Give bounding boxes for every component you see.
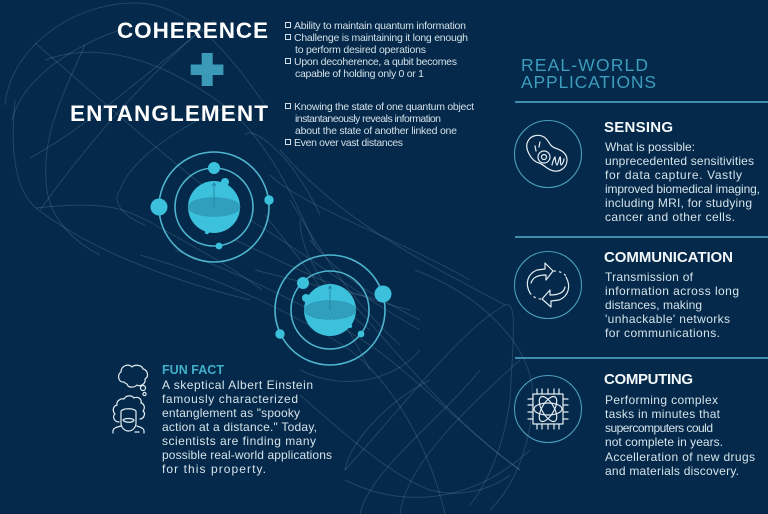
- heading: sensing: SENSING: [604, 119, 673, 136]
- text block: computing: [605, 393, 755, 478]
- text block: coherence bullets: capable of holding only 0 or 1: [295, 68, 424, 80]
- text block: computing: tasks in minutes that: [605, 407, 721, 421]
- text block: coherence bullets: to perform desired operations: [295, 44, 426, 56]
- text block: sensing: including MRI, for studying: [605, 196, 752, 210]
- text block: communication: [605, 270, 739, 340]
- icon: quantum chip: [514, 376, 582, 442]
- background wireframe capsule: [5, 3, 532, 514]
- text block: fun fact: for this property.: [162, 462, 266, 476]
- text block: computing: supercomputers could: [605, 421, 713, 435]
- heading: fun fact: FUN FACT: [162, 363, 224, 377]
- atom: second qubit: [275, 255, 392, 365]
- text block: communication: 'unhackable' networks: [605, 312, 730, 326]
- text block: entanglement bullets: Knowing the state of one quantum object: [294, 101, 474, 113]
- text block: entanglement bullets: [286, 101, 474, 149]
- text block: fun fact: A skeptical Albert Einstein: [162, 378, 313, 392]
- text block: computing: not complete in years.: [605, 435, 723, 449]
- text block: sensing: [605, 140, 760, 224]
- icon: plus sign: [191, 53, 223, 86]
- heading: real-world applications: [521, 55, 656, 92]
- text block: entanglement bullets: Even over vast distances: [294, 137, 403, 149]
- text block: communication: information across long: [605, 284, 739, 298]
- text block: communication: distances, making: [605, 298, 702, 312]
- icon: einstein with thought bubble: [113, 365, 147, 433]
- text block: entanglement bullets: instantaneously reveals information: [295, 113, 441, 125]
- title: coherence: COHERENCE: [117, 18, 268, 43]
- text block: coherence bullets: Challenge is maintaining it long enough: [294, 32, 468, 44]
- panel: communication: [514, 249, 739, 340]
- text block: fun fact: action at a distance." Today,: [162, 420, 317, 434]
- text block: coherence bullets: Ability to maintain quantum information: [294, 20, 466, 32]
- text block: fun fact: scientists are finding many: [162, 434, 316, 448]
- panel: sensing: [514, 119, 760, 224]
- text block: fun fact: entanglement as "spooky: [162, 406, 300, 420]
- heading: computing: COMPUTING: [604, 371, 693, 388]
- text block: sensing: improved biomedical imaging,: [605, 182, 760, 196]
- text block: coherence bullets: Upon decoherence, a qubit becomes: [294, 56, 457, 68]
- text block: computing: Performing complex: [605, 393, 718, 407]
- icon: cell: [514, 120, 582, 188]
- heading: real-world applications: REAL-WORLD: [521, 55, 648, 75]
- text block: computing: Accelleration of new drugs: [605, 450, 755, 464]
- heading: real-world applications: APPLICATIONS: [521, 72, 656, 92]
- text block: entanglement bullets: about the state of another linked one: [295, 125, 457, 137]
- text block: sensing: unprecedented sensitivities: [605, 154, 754, 168]
- atom: first qubit: [150, 152, 274, 262]
- text block: computing: and materials discovery.: [605, 464, 739, 478]
- heading: communication: COMMUNICATION: [604, 249, 733, 266]
- text block: sensing: cancer and other cells.: [605, 210, 735, 224]
- panel: computing: [514, 371, 755, 478]
- text block: fun fact: famously characterized: [162, 392, 298, 406]
- text block: sensing: What is possible:: [605, 140, 695, 154]
- text block: communication: for communications.: [605, 326, 720, 340]
- text block: fun fact: [162, 378, 332, 476]
- text block: sensing: for data capture. Vastly: [605, 168, 742, 182]
- title: entanglement: ENTANGLEMENT: [70, 101, 268, 126]
- text block: communication: Transmission of: [605, 270, 694, 284]
- icon: circular arrows: [514, 252, 582, 318]
- text block: coherence bullets: [286, 20, 468, 80]
- text block: fun fact: possible real-world applications: [162, 448, 332, 462]
